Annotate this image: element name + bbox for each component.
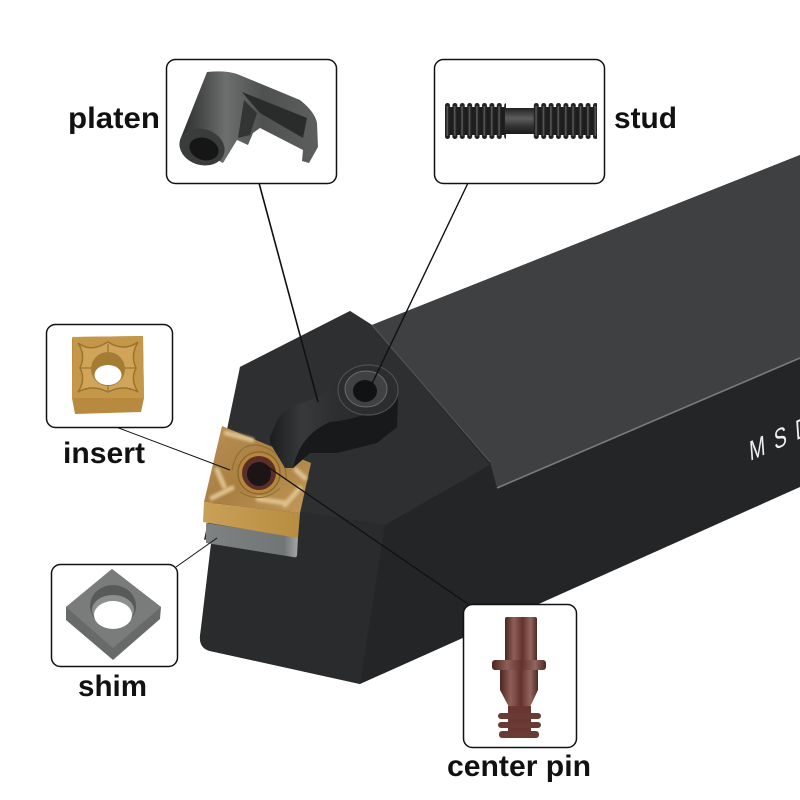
platen clamp on holder — [270, 364, 398, 468]
icon: insert — [72, 336, 144, 414]
icon: center pin — [492, 617, 546, 738]
insert on holder — [203, 426, 311, 538]
icon: stud — [444, 103, 597, 139]
label: insert: insert — [63, 437, 145, 470]
callout: center pin — [464, 604, 576, 748]
front faces — [200, 155, 800, 684]
icon: platen — [175, 71, 318, 171]
callout: stud — [434, 60, 604, 184]
label: stud: stud — [614, 102, 677, 135]
callout: insert — [46, 324, 172, 428]
head lower facet — [200, 512, 385, 684]
label: center pin: center pin — [447, 750, 591, 783]
head top face — [204, 311, 490, 540]
icon: shim — [66, 569, 161, 660]
leader lines — [116, 183, 468, 604]
callout: platen — [166, 60, 336, 184]
chamfer highlight — [497, 358, 800, 488]
label: platen: platen — [68, 102, 160, 135]
top shank face — [372, 155, 800, 488]
callout: shim — [52, 564, 178, 666]
label: shim: shim — [78, 670, 147, 703]
shim on holder — [206, 523, 298, 557]
tool holder body — [200, 155, 800, 684]
